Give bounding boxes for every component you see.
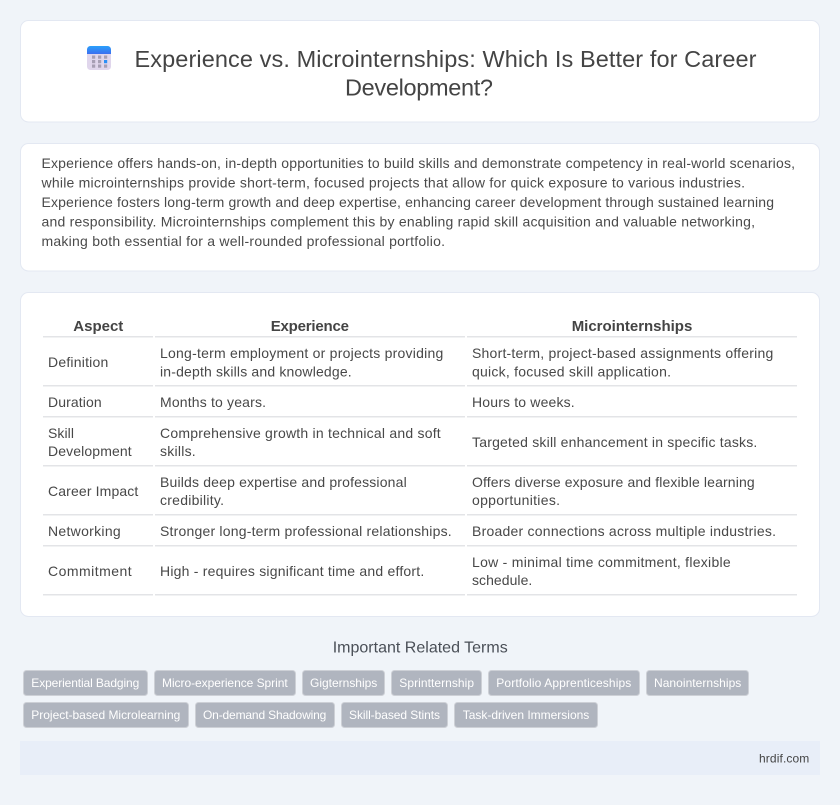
related term tags: Gigternships	[310, 676, 377, 690]
related term tags: Task-driven Immersions	[463, 708, 589, 722]
row: Commitment: schedule.	[472, 572, 532, 588]
row: Definition: quick, focused skill application.	[472, 364, 671, 380]
panel: summary text: while microinternships provide short-term, focused projects that allow for quick exposure to various industries.	[40, 174, 745, 190]
row: Career Impact: Builds deep expertise and professional	[160, 474, 407, 490]
footer: hrdif.com	[759, 752, 809, 766]
row: Definition	[43, 345, 797, 386]
row: Skill Development	[43, 425, 797, 466]
row: Career Impact: Offers diverse exposure and flexible learning	[472, 474, 755, 490]
row: Career Impact: Career Impact	[48, 483, 138, 499]
row: Definition: in-depth skills and knowledge.	[160, 364, 352, 380]
title	[134, 46, 757, 100]
title: Development?	[345, 74, 493, 100]
row: Networking	[43, 523, 797, 546]
title: Experience vs. Microinternships: Which Is Better for Career	[134, 46, 757, 72]
related term tags	[24, 670, 748, 728]
related term tags: Project-based Microlearning	[31, 708, 180, 722]
related term tags: Sprintternship	[399, 676, 474, 690]
row: Definition: Short-term, project-based assignments offering	[472, 345, 773, 361]
row: Commitment: High - requires significant time and effort.	[160, 563, 424, 579]
row: Definition: Definition	[48, 354, 108, 370]
row: Networking: Broader connections across multiple industries.	[472, 523, 776, 539]
table header row: Microinternships	[572, 318, 692, 335]
heading: related terms: Important Related Terms	[333, 640, 508, 656]
row: Skill Development: Development	[48, 443, 132, 459]
related term tags: Nanointernships	[654, 676, 741, 690]
row: Career Impact	[43, 474, 797, 516]
row: Duration	[43, 394, 797, 418]
footer	[20, 741, 820, 775]
row: Skill Development: Skill	[48, 425, 74, 441]
row: Skill Development: skills.	[160, 443, 196, 459]
row: Networking: Stronger long-term professional relationships.	[160, 523, 452, 539]
row: Duration: Duration	[48, 394, 102, 410]
icon: calendar	[87, 46, 111, 70]
row: Skill Development: Comprehensive growth in technical and soft	[160, 425, 441, 441]
row: Career Impact: credibility.	[160, 492, 224, 508]
table header row: Experience	[271, 318, 349, 335]
table header row: Aspect	[73, 318, 123, 335]
panel: summary text: and responsibility. Microinternships complement this by enabling rapid skill acquisition and valuable networking,	[42, 214, 755, 230]
panel: summary text	[20, 144, 820, 271]
row: Duration: Months to years.	[160, 394, 266, 410]
row: Definition: Long-term employment or projects providing	[160, 345, 443, 361]
row: Commitment: Commitment	[48, 563, 132, 579]
row: Commitment	[43, 554, 797, 596]
related term tags: Portfolio Apprenticeships	[496, 676, 631, 690]
related term tags: On-demand Shadowing	[203, 708, 326, 722]
panel: comparison table	[20, 292, 820, 616]
table header row	[43, 318, 797, 338]
row: Skill Development: Targeted skill enhancement in specific tasks.	[472, 434, 757, 450]
related term tags: Experiential Badging	[31, 676, 139, 690]
panel: summary text: making both essential for a well-rounded professional portfolio.	[42, 233, 445, 249]
panel: title header	[20, 20, 820, 122]
row: Career Impact: opportunities.	[472, 492, 560, 508]
row: Duration: Hours to weeks.	[472, 394, 575, 410]
row: Networking: Networking	[48, 523, 121, 539]
related term tags: Micro-experience Sprint	[162, 676, 288, 690]
related term tags: Skill-based Stints	[349, 708, 440, 722]
row: Commitment: Low - minimal time commitment, flexible	[472, 554, 731, 570]
panel: summary text: Experience offers hands-on, in-depth opportunities to build skills and demonstrate competency in real-world scenarios,	[42, 155, 795, 171]
panel: summary text: Experience fosters long-term growth and deep expertise, enhancing career development through sustained learning	[42, 194, 774, 210]
